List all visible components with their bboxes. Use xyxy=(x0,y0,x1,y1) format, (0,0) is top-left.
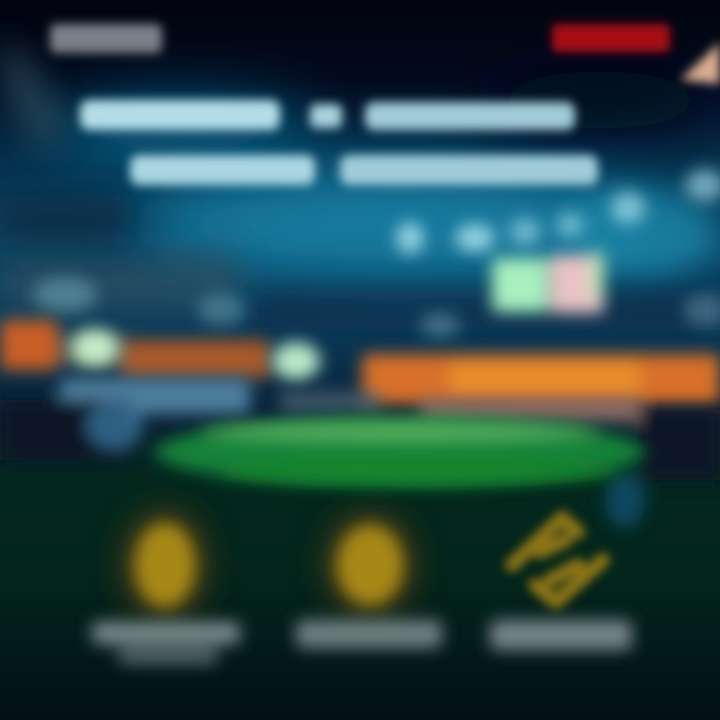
floodlights xyxy=(33,169,720,337)
logo top left xyxy=(50,24,162,53)
pitch xyxy=(155,418,645,486)
right caption xyxy=(490,620,632,650)
pale green highlights xyxy=(71,329,320,380)
lower stands xyxy=(0,378,720,528)
icon: middle gold medal xyxy=(326,513,414,617)
icon: left gold medal xyxy=(123,511,207,619)
title xyxy=(80,100,598,185)
orange stands xyxy=(0,320,720,404)
sky and stadium roof glow xyxy=(0,40,720,330)
middle caption xyxy=(296,620,442,648)
corner accent top right xyxy=(680,42,720,84)
big screen xyxy=(492,252,604,313)
red badge top right xyxy=(552,24,670,52)
icon: right gold arrows xyxy=(512,518,603,602)
left caption xyxy=(92,622,240,664)
